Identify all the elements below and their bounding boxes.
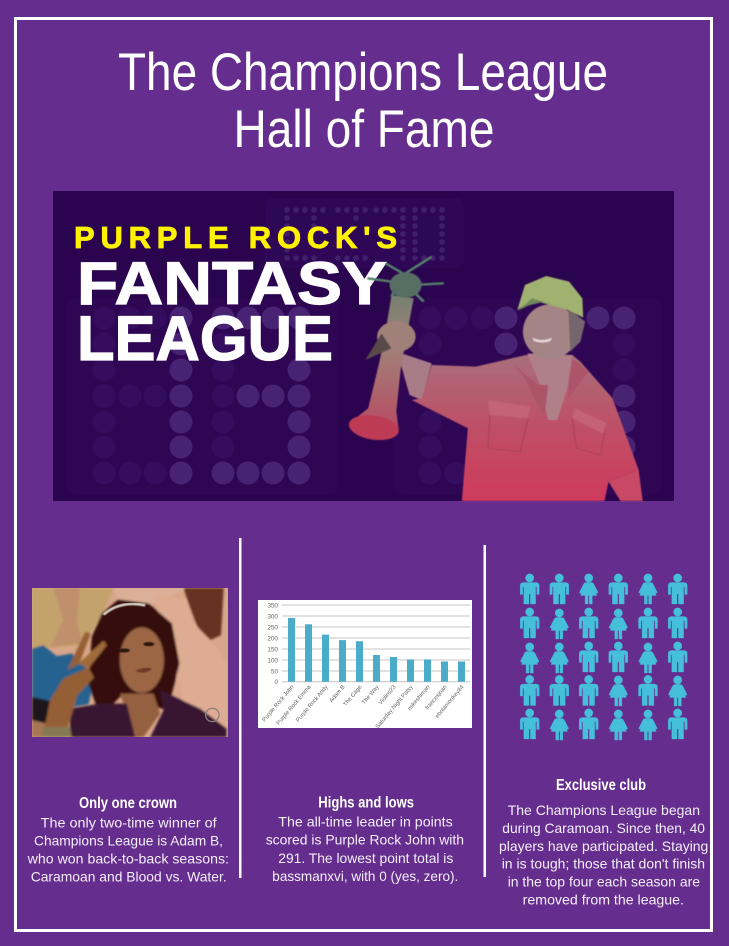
text block: only one crown: who won back-to-back seasons: — [27, 851, 229, 867]
category labels: The Cage — [343, 684, 364, 708]
text block: exclusive club: Exclusive club — [556, 777, 646, 794]
axis labels: 200 — [267, 636, 278, 642]
category labels: Purple Rock John — [262, 684, 296, 723]
text block: exclusive club: players have participated. Staying — [499, 838, 708, 854]
text block: exclusive club — [499, 777, 708, 908]
text block: highs and lows: 291. The lowest point total is — [278, 850, 453, 866]
axis labels: 350 — [267, 602, 278, 610]
text block: highs and lows: Highs and lows — [318, 795, 414, 812]
title — [118, 43, 608, 159]
text block: exclusive club: during Caramoan. Since then, 40 — [502, 820, 705, 836]
divider 2 — [484, 545, 486, 877]
text block: highs and lows — [266, 795, 464, 884]
icon grid: 30 players — [520, 574, 687, 740]
title: The Champions League — [118, 43, 608, 102]
text block: only one crown: Caramoan and Blood vs. Water. — [31, 869, 227, 885]
torch — [349, 295, 414, 430]
text block: highs and lows: The all-time leader in points — [278, 814, 453, 830]
man holding torch — [346, 257, 643, 501]
category labels: The Way — [361, 684, 381, 706]
category labels: Saturday Night Patsy — [375, 684, 415, 730]
text block: exclusive club: The Champions League began — [508, 802, 700, 818]
banner logo text: PURPLE ROCK'S — [74, 220, 397, 255]
text block: exclusive club: in is tough; those that don't finish — [502, 856, 705, 872]
category labels: Adam B — [329, 684, 347, 704]
title: Hall of Fame — [234, 100, 494, 159]
text block: only one crown: The only two-time winner of — [41, 815, 217, 831]
text block: highs and lows: scored is Purple Rock John with — [266, 832, 464, 848]
axis labels: 100 — [267, 658, 278, 664]
category labels: ebolamonkey84 — [435, 684, 466, 720]
axis labels: 50 — [271, 668, 278, 676]
banner: Purple Rock's Fantasy League — [53, 191, 674, 501]
banner logo text: LEAGUE — [77, 304, 333, 374]
text block: exclusive club: removed from the league. — [523, 892, 684, 908]
text block: only one crown: Only one crown — [79, 795, 177, 812]
axis labels — [267, 602, 278, 686]
text block: highs and lows: bassmanxvi, with 0 (yes, zero). — [272, 868, 458, 884]
text block: only one crown — [27, 795, 229, 885]
banner logo text — [74, 220, 397, 374]
text block: only one crown: Champions League is Adam B, — [34, 833, 223, 849]
category labels: francesjoan — [425, 684, 449, 711]
axis labels: 250 — [267, 624, 278, 632]
category labels — [262, 684, 466, 730]
axis labels: 300 — [267, 614, 278, 620]
axis labels: 150 — [267, 646, 278, 654]
category labels: Purple Rock Andy — [295, 684, 330, 724]
photo: winner with tiara — [32, 588, 228, 737]
divider 1 — [239, 538, 242, 878]
banner logo text: FANTASY — [77, 250, 387, 317]
text block: exclusive club: in the top four each season are — [508, 874, 700, 890]
bar chart: all-time points — [258, 600, 472, 730]
category labels: Purple Rock Emma — [276, 684, 313, 727]
category labels: mikeshiman — [407, 684, 432, 712]
bars — [288, 618, 465, 682]
axis labels: 0 — [274, 679, 278, 686]
category labels: Violins23 — [378, 684, 398, 706]
